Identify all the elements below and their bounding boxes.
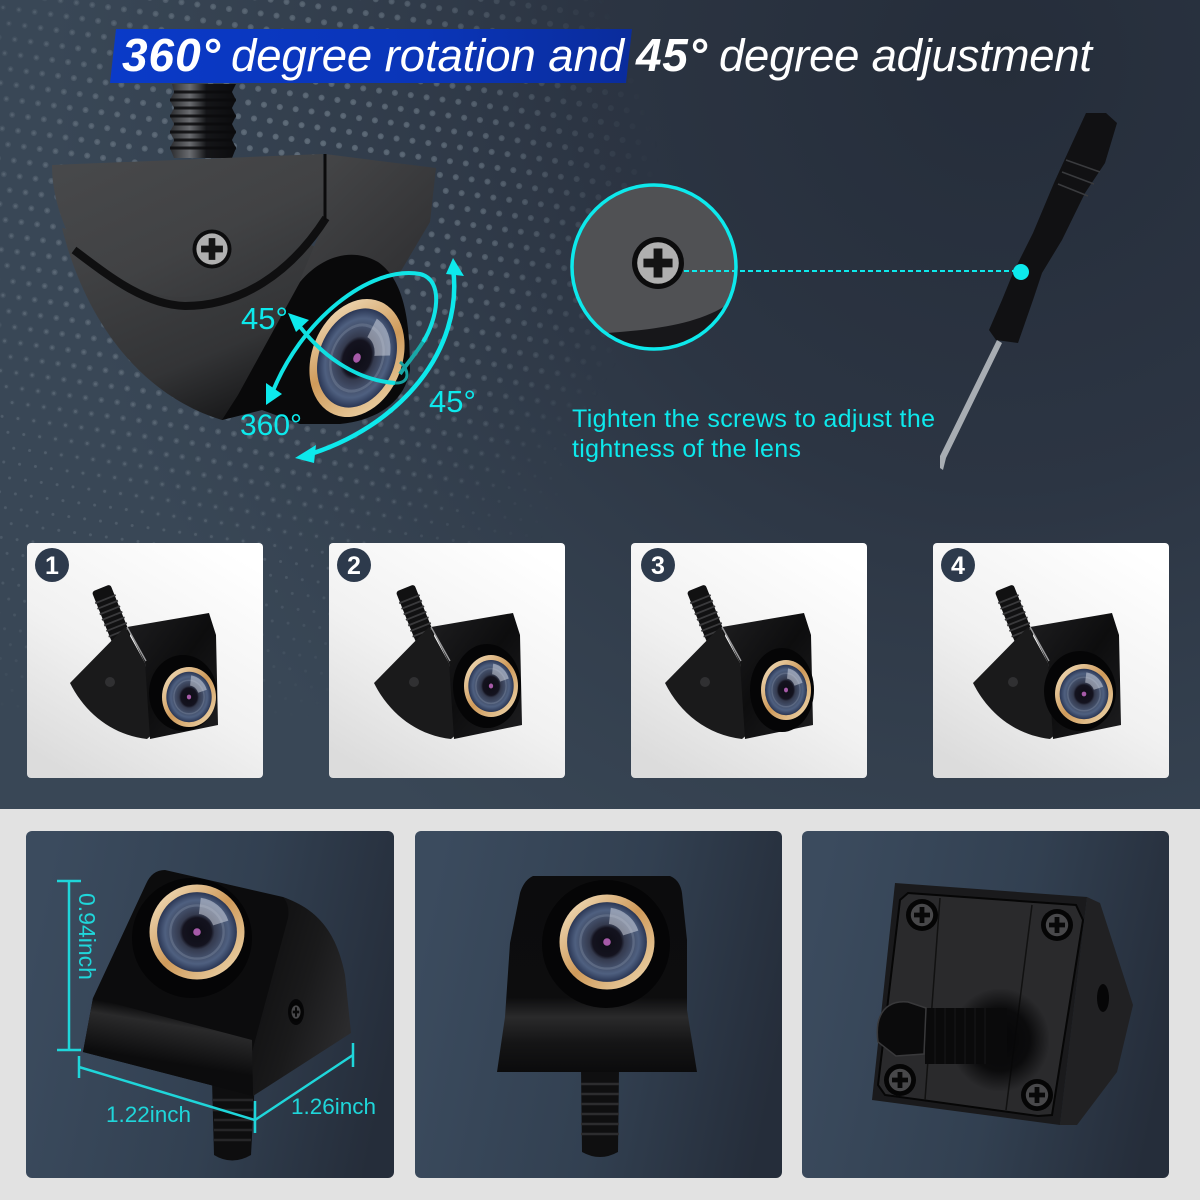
panel: lens position 1 <box>27 543 263 778</box>
camera icon <box>973 584 1121 739</box>
lens housing <box>132 878 252 998</box>
camera side wing <box>298 154 436 285</box>
lens housing <box>542 880 670 1008</box>
lens <box>1044 651 1116 731</box>
page background <box>0 0 1200 810</box>
camera icon <box>374 584 522 739</box>
plate groove lines <box>925 898 1032 1110</box>
title <box>110 29 1094 83</box>
panel: front view <box>415 831 782 1178</box>
360 degree label: 360° <box>240 409 302 442</box>
bolt <box>581 1068 619 1157</box>
screw on camera <box>192 230 232 268</box>
panel: rear view <box>802 831 1169 1178</box>
depth label: 1.26inch <box>291 1094 376 1119</box>
camera back outer <box>872 883 1087 1125</box>
lens <box>560 894 654 990</box>
lens <box>150 884 244 980</box>
45 degree label left: 45° <box>241 301 288 336</box>
panel: dimensions <box>26 831 394 1178</box>
lens <box>453 644 521 728</box>
mounting screws <box>884 899 1073 1111</box>
halftone dot texture small <box>0 0 541 654</box>
lens <box>750 648 814 732</box>
magnified screw <box>632 237 684 289</box>
lens <box>149 655 217 731</box>
panel: lens position 4 <box>933 543 1169 778</box>
large 45 degree arrow <box>295 258 464 463</box>
step badge 3: 3 <box>651 552 665 580</box>
adjustment instruction text: tightness of the lens <box>572 435 801 463</box>
camera side <box>1060 897 1133 1125</box>
halftone dot texture large <box>0 0 620 508</box>
lens housing <box>222 255 410 424</box>
45 degree label right: 45° <box>429 384 476 419</box>
adjustment instruction text: Tighten the screws to adjust the <box>572 405 935 433</box>
width label: 1.22inch <box>106 1102 191 1127</box>
camera lens <box>292 285 422 431</box>
camera lower body <box>62 228 392 420</box>
leader dot <box>1013 264 1029 280</box>
screwdriver shaft <box>940 340 1002 470</box>
step badge 1 <box>35 548 69 582</box>
front glossy band <box>83 998 253 1096</box>
height dimension <box>57 881 81 1050</box>
title highlight banner <box>110 29 632 83</box>
title text: degree rotation and <box>231 30 626 81</box>
icon: screwdriver <box>940 113 1117 470</box>
side screw cross <box>290 1002 302 1022</box>
step badge 3 <box>641 548 675 582</box>
card background <box>631 543 867 778</box>
card background <box>329 543 565 778</box>
card background <box>27 543 263 778</box>
main camera with rotation arrows <box>52 84 476 463</box>
step badge 2 <box>337 548 371 582</box>
depth dimension <box>255 1043 353 1120</box>
camera front plate <box>52 154 326 297</box>
step badge 1: 1 <box>45 552 59 580</box>
side screw <box>1097 984 1109 1012</box>
360 degree rotation arrow <box>266 273 436 405</box>
magnified screw circle <box>572 185 736 349</box>
card background <box>933 543 1169 778</box>
screw detail callout <box>572 185 1029 349</box>
dark body edge in circle <box>607 306 725 348</box>
step badge 4: 4 <box>951 552 965 580</box>
step badge 2: 2 <box>347 552 361 580</box>
panel background <box>26 831 394 1178</box>
side screw <box>288 999 304 1025</box>
camera side <box>250 897 351 1096</box>
bolt thread shadows <box>170 92 236 148</box>
plate edge crease <box>74 218 326 306</box>
panel background <box>802 831 1169 1178</box>
camera icon <box>665 584 814 739</box>
bolt <box>212 1080 255 1160</box>
height label: 0.94inch <box>74 893 100 980</box>
dashed leader line <box>684 270 1020 272</box>
panel background <box>415 831 782 1178</box>
width dimension <box>79 1056 255 1133</box>
camera icon <box>70 584 218 739</box>
step badge 4 <box>941 548 975 582</box>
title text: 360° <box>122 29 221 81</box>
title text: degree adjustment <box>719 30 1094 81</box>
lower section background <box>0 809 1200 1200</box>
45 degree adjustment arrow <box>288 313 407 383</box>
camera body <box>497 876 697 1072</box>
screwdriver handle <box>989 113 1117 343</box>
camera back plate <box>878 893 1083 1116</box>
title text: 45° <box>635 29 708 81</box>
threaded bolt <box>877 988 1050 1092</box>
camera front <box>83 870 288 1096</box>
camera threaded bolt <box>170 84 236 158</box>
panel: lens position 3 <box>631 543 867 778</box>
panel: lens position 2 <box>329 543 565 778</box>
